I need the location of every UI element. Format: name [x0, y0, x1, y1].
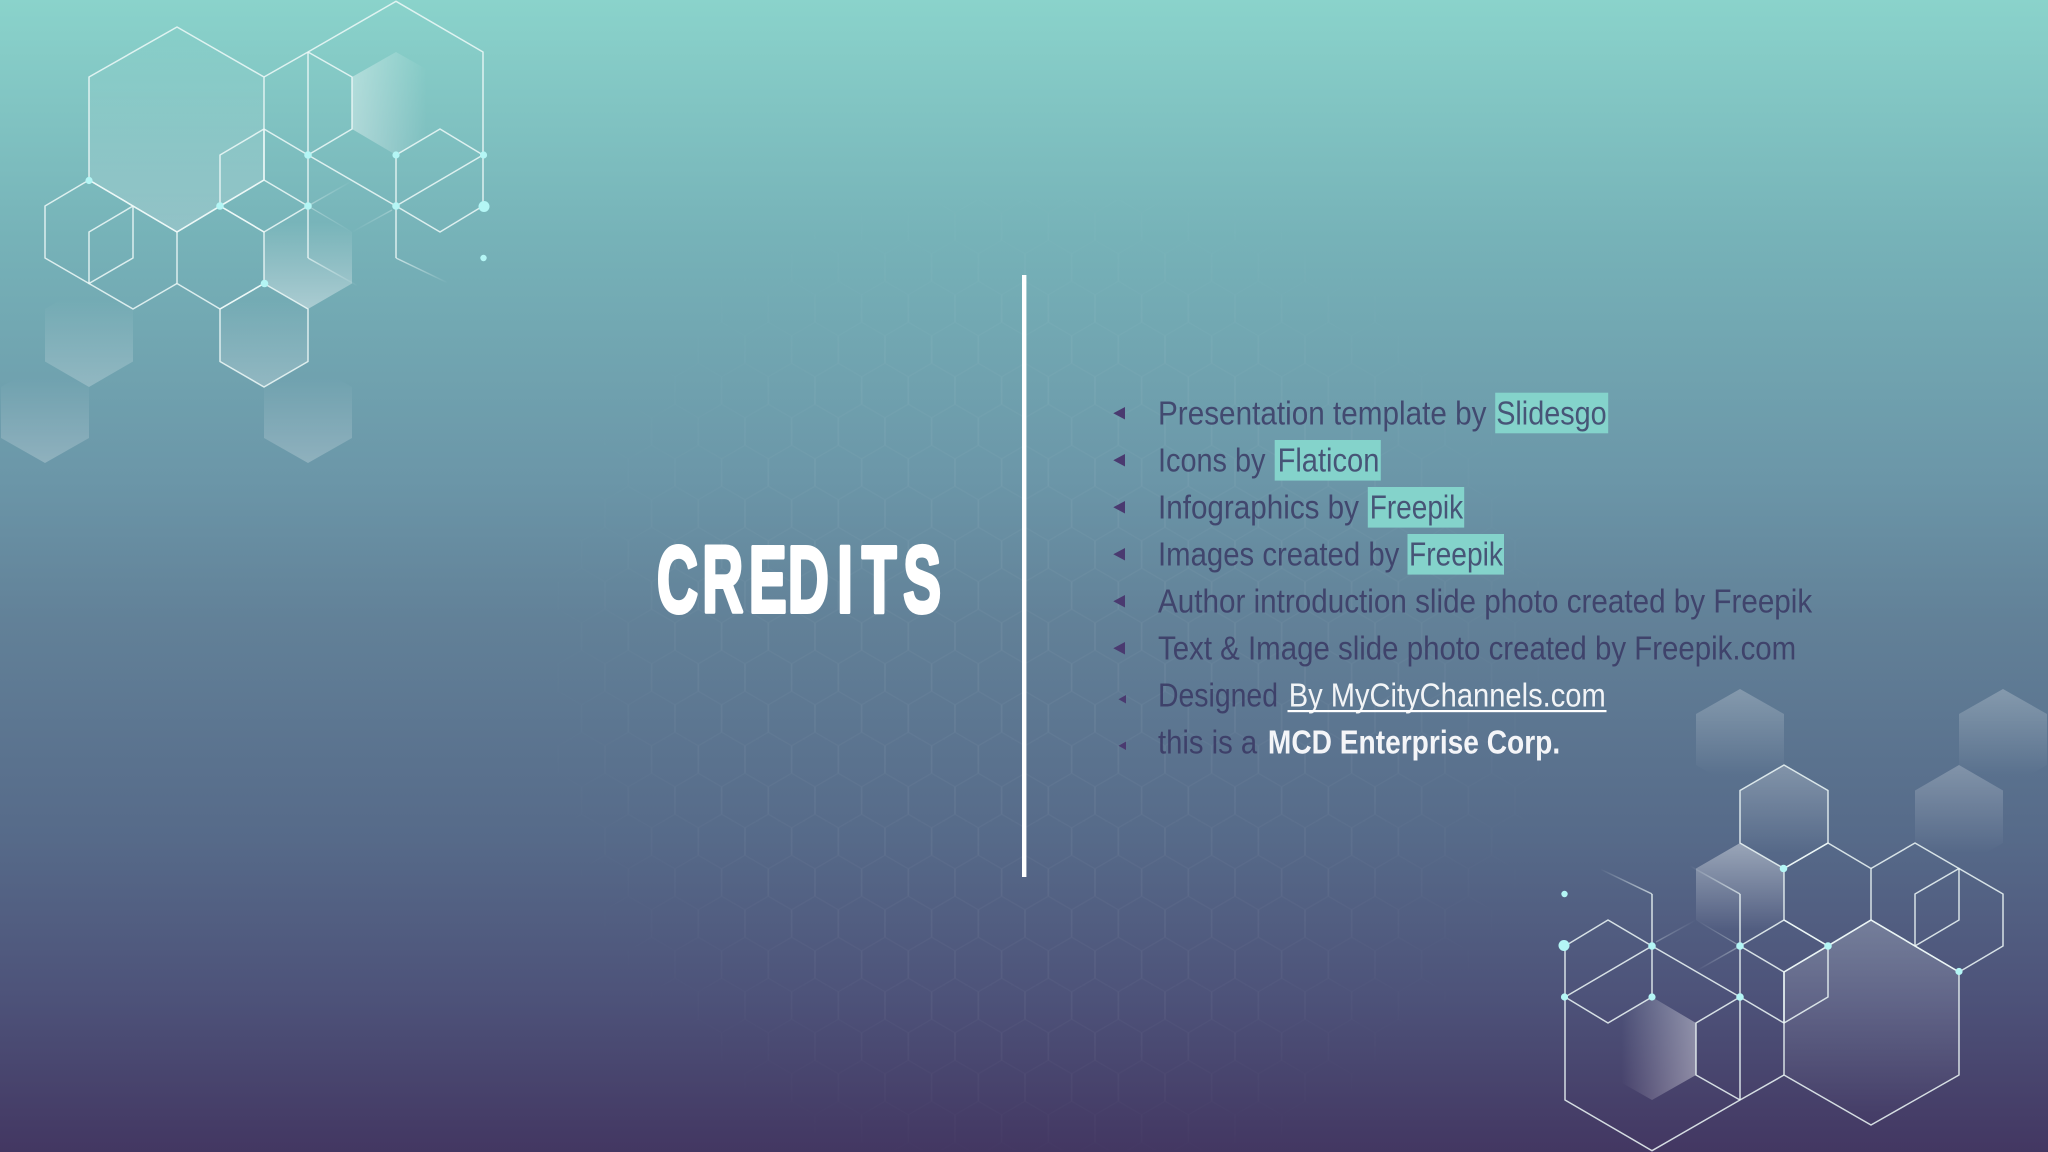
item: author photo: Author introduction slide photo created by Freepik	[1158, 584, 1812, 620]
item: text and image photo: Text & Image slide photo created by Freepik.com	[1158, 630, 1796, 668]
item: designed by	[1118, 678, 1606, 714]
item: enterprise	[1118, 724, 1560, 762]
item: designed by: Designed	[1158, 678, 1278, 714]
item: icons	[1113, 440, 1381, 481]
item: presentation template	[1113, 393, 1608, 433]
item: images: Freepik	[1409, 536, 1503, 574]
item: designed by: By MyCityChannels.com	[1289, 678, 1606, 714]
item: icons: Flaticon	[1278, 442, 1379, 480]
item: infographics	[1113, 487, 1464, 528]
background hexagon pattern	[862, 561, 1236, 958]
item: images	[1113, 534, 1504, 575]
vertical divider	[1022, 275, 1026, 877]
item: infographics: Infographics by	[1158, 490, 1359, 526]
item: icons: Icons by	[1158, 442, 1266, 480]
title: CREDITS	[657, 526, 941, 633]
hexagon network: top left	[1, 1, 490, 463]
item: infographics: Freepik	[1370, 490, 1463, 526]
item: images: Images created by	[1158, 536, 1400, 574]
credits list	[1113, 393, 1812, 762]
item: enterprise: this is a	[1158, 724, 1258, 762]
item: presentation template: Slidesgo	[1496, 396, 1607, 432]
item: enterprise: MCD Enterprise Corp.	[1268, 724, 1560, 762]
hexagon network: bottom right	[1558, 689, 2047, 1151]
item: presentation template: Presentation template by	[1158, 396, 1487, 432]
